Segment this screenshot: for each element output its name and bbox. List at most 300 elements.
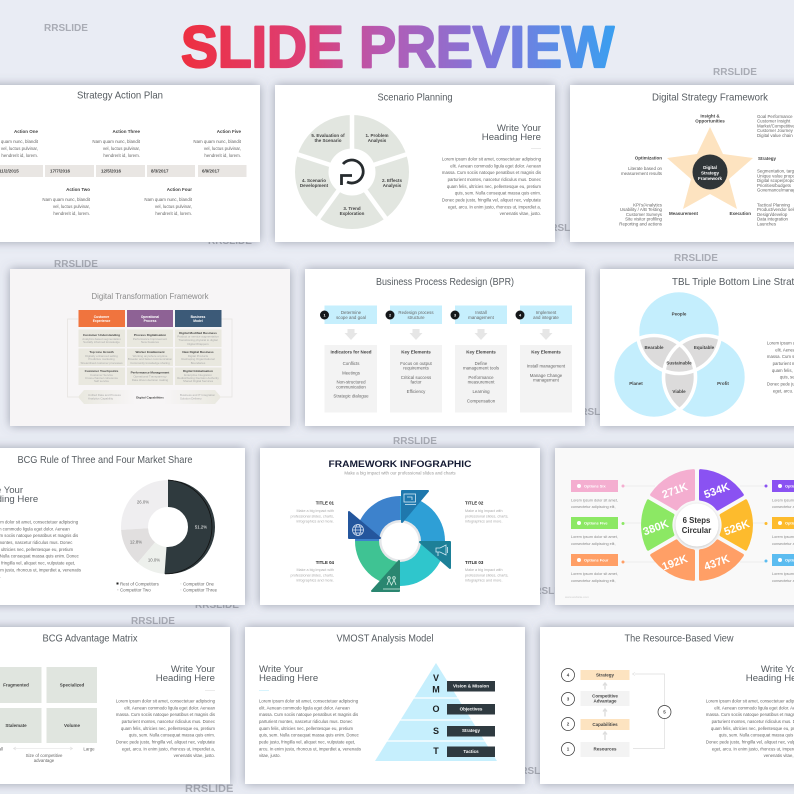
framework table cells: Customer Touchpoints xyxy=(85,369,119,373)
framework table cells xyxy=(78,330,222,385)
star labels: Digital value chain xyxy=(757,133,793,138)
framework table cells: Customer Understanding xyxy=(83,333,120,337)
text block: heading and lorem: Write Your xyxy=(171,664,216,675)
quadrant captions: TITLE 03 xyxy=(465,560,484,565)
quadrant captions: infographics and more. xyxy=(296,578,334,582)
quadrant captions: TITLE 01 xyxy=(316,500,335,506)
indicator and element boxes: Indicators for Need xyxy=(330,350,372,354)
text block: heading and lorem: elit. Aenean commodo ligula eget dolor. Aenean xyxy=(450,163,542,168)
numbered circles: 3 xyxy=(567,696,570,702)
numbered circles: 2 xyxy=(567,722,570,726)
quadrant captions: professional slides, charts, xyxy=(291,514,334,518)
wheel center: 6 Steps xyxy=(683,516,711,525)
heading: digital strategy framework: Digital Strategy Framework xyxy=(652,92,769,104)
heading: bpr: Business Process Redesign (BPR) xyxy=(376,276,514,288)
text block: heading and lorem xyxy=(0,485,81,579)
step headers xyxy=(320,306,572,324)
framework table cells: Redistributing Decision Authority xyxy=(177,376,219,380)
ladder boxes: Resources xyxy=(593,746,617,752)
star labels: Execution xyxy=(729,211,751,216)
action labels: hendrerit id, lorem. xyxy=(204,153,241,158)
step headers: 4 xyxy=(519,314,522,318)
pie: five scenario wedges: 3. Trend xyxy=(343,206,361,211)
donut chart: 12.8% xyxy=(130,540,142,544)
icon: team xyxy=(383,577,400,589)
left option tags: Lorem ipsum dolor sit amet, xyxy=(571,498,618,502)
indicator and element boxes: Meetings xyxy=(342,370,361,376)
axis: size of competitive advantage: Size of competitive xyxy=(26,753,63,758)
action labels: Action Five xyxy=(217,129,241,134)
ladder boxes xyxy=(580,670,630,757)
text block: heading and lorem: venenatis vitae, justo. xyxy=(500,211,541,216)
feedback connector: 5 xyxy=(663,710,666,714)
text block: heading and lorem: Donec pede justo, fringilla vel, aliquet nec, vulputate xyxy=(442,198,542,202)
pie: five scenario wedges: the Scenario xyxy=(314,138,342,143)
star labels xyxy=(619,114,794,226)
venn diagram xyxy=(612,290,746,418)
framework table cells: Customer Service xyxy=(90,373,113,377)
watermarks: RRSLIDE xyxy=(393,436,437,447)
panel: vmost analysis model xyxy=(245,627,525,784)
action labels: Action One xyxy=(14,129,38,134)
left option tags: consectetur adipiscing elit, xyxy=(571,579,616,583)
text block: heading and lorem xyxy=(442,123,542,216)
icon: circular arrow xyxy=(342,160,363,185)
step headers: Determine xyxy=(341,310,362,315)
star labels: Reporting and actions xyxy=(619,222,663,226)
star diagram: Strategy xyxy=(701,170,719,176)
action labels: hendrerit id, lorem. xyxy=(1,153,38,158)
venn diagram: Planet xyxy=(629,381,643,386)
panel: bcg rule of three and four xyxy=(0,448,245,605)
step headers: Redesign process xyxy=(398,310,434,315)
column headers: Process xyxy=(144,319,157,323)
star labels: Customer Insight xyxy=(757,118,791,124)
panel: digital transformation framework xyxy=(10,269,290,426)
text block: heading and lorem xyxy=(116,664,216,758)
watermarks: RRSLIDE xyxy=(131,616,175,627)
framework table cells: Performance Improvement xyxy=(133,337,167,341)
panel: digital strategy framework xyxy=(570,85,794,242)
quadrant captions: TITLE 04 xyxy=(316,560,335,565)
pie: five scenario wedges: 1. Problem xyxy=(365,133,389,138)
star labels: Strategy xyxy=(758,156,777,161)
indicator and element boxes: requirements xyxy=(403,366,430,370)
star diagram: Framework xyxy=(698,176,722,181)
icon: presentation xyxy=(404,494,416,504)
footer url: www.website.com xyxy=(565,595,589,599)
outer connector lines xyxy=(68,319,232,397)
pie: five scenario wedges: 2. Effects xyxy=(382,178,402,183)
heading: vmost: VMOST Analysis Model xyxy=(336,632,434,644)
framework table cells: Digital Globalisation xyxy=(183,369,213,373)
panel: bcg advantage matrix xyxy=(0,627,230,784)
text block: heading and lorem: arcu. In enim justo, rhoncus ut, imperdiet a, venenatis xyxy=(259,746,361,751)
text block: heading and lorem: Lorem ipsum dolor sit amet, consectetuer adipiscing xyxy=(442,156,542,162)
icon: megaphone xyxy=(436,545,448,556)
indicator and element boxes: factor xyxy=(411,380,422,384)
quadrant captions: infographics and more. xyxy=(296,520,334,524)
axis: size of competitive advantage xyxy=(0,746,95,763)
step headers: management xyxy=(468,315,495,320)
indicator and element boxes: communication xyxy=(336,384,366,390)
watermarks: RRSLIDE xyxy=(54,259,98,270)
star labels: Launches xyxy=(757,222,777,226)
heading: bcg advantage matrix: BCG Advantage Matrix xyxy=(42,632,138,644)
quadrant captions: infographics and more. xyxy=(465,520,503,524)
digital capabilities banner: Digital Capabilities xyxy=(136,396,164,400)
action labels: vel, luctus pulvinar, xyxy=(103,146,140,151)
text block: heading and lorem: Heading Here xyxy=(482,132,541,143)
pie: five scenario wedges: Exploration xyxy=(340,211,365,216)
left option tags: Options Six xyxy=(584,484,606,488)
star labels: Customer Journey xyxy=(757,128,794,133)
text block: heading and lorem: Write Your xyxy=(259,664,304,675)
wheel values xyxy=(642,481,751,573)
text block: heading and lorem: Heading Here xyxy=(259,673,318,684)
text block: heading and lorem: massa. Cum sociis natoque penatibus et magnis dis xyxy=(442,170,541,175)
heading: digital transformation framework: Digital Transformation Framework xyxy=(92,292,209,301)
action labels: Nam quam nunc, blandit xyxy=(144,197,193,202)
timeline date bars: 12/5/2016 xyxy=(101,168,122,174)
action labels: vel, luctus pulvinar, xyxy=(1,146,38,151)
matrix quadrants: Volume xyxy=(64,723,80,728)
quadrant captions: Make a big impact with xyxy=(296,568,334,572)
wheel wedges xyxy=(627,459,767,591)
framework table cells: Boundaries xyxy=(191,361,206,365)
text block: heading and lorem: elit. Aenean commodo ligula eget dolor. Aenean xyxy=(124,705,216,710)
left option tags: Lorem ipsum dolor sit amet, xyxy=(571,535,618,539)
indicator and element boxes: Define xyxy=(475,361,488,366)
wheel center: Circular xyxy=(682,526,711,535)
step headers: 3 xyxy=(454,314,456,318)
chart legend: Competitor Two xyxy=(120,588,151,592)
step headers: Install xyxy=(475,310,487,315)
watermarks: RRSLIDE xyxy=(543,223,587,234)
star labels: Usability / A/B Testing xyxy=(620,207,663,212)
framework table cells: Worker Enablement xyxy=(136,350,164,354)
action labels: Action Three xyxy=(112,129,140,134)
matrix quadrants: Specialized xyxy=(60,682,85,688)
heading: scenario planning: Scenario Planning xyxy=(378,92,453,104)
text block: heading and lorem: elit. Aenean commodo ligula eget dolor. Aenean xyxy=(259,705,350,710)
text block: heading and lorem: quis, sem. Nulla consequat massa quis enim. xyxy=(455,191,541,196)
watermarks: RRSLIDE xyxy=(513,766,557,777)
star labels: Data integration xyxy=(757,216,789,222)
pyramid: O xyxy=(432,704,440,714)
numbered circles: 1 xyxy=(567,746,570,752)
matrix quadrants xyxy=(0,667,97,743)
star labels: Opportunities xyxy=(695,118,725,124)
panel: scenario planning xyxy=(275,85,555,242)
framework table cells: Digitally enhanced selling xyxy=(85,354,118,358)
indicator and element boxes: Focus on output xyxy=(400,361,433,366)
ladder boxes: Capabilities xyxy=(592,722,618,727)
timeline date bars: 8/3/2017 xyxy=(151,168,169,174)
digital capabilities banner: Unified Data and Process xyxy=(88,393,121,397)
text block: heading and lorem: quis, sem. Nulla consequat massa quis enim. Donec xyxy=(259,733,360,738)
numbered circles xyxy=(562,668,574,756)
star labels: Priorities/budgets xyxy=(757,183,792,188)
star labels: Market/Competitive xyxy=(757,124,794,128)
indicator and element boxes: Strategic dialogue xyxy=(333,394,369,398)
panel: tbl triple bottom line xyxy=(600,269,794,426)
indicator and element boxes: Compensation xyxy=(467,398,496,404)
text block: heading and lorem xyxy=(706,664,794,758)
framework table cells: New Digital Business xyxy=(182,350,214,354)
indicator and element boxes xyxy=(324,345,572,412)
timeline date bars xyxy=(0,165,246,177)
framework table cells: Digital Wrappers xyxy=(187,342,209,346)
indicator and element boxes: Efficiency xyxy=(407,389,426,394)
action labels: vel, luctus pulvinar, xyxy=(53,204,90,209)
framework table cells: Reshaping Organizational xyxy=(181,357,215,361)
ladder boxes: Strategy xyxy=(596,672,614,678)
action labels xyxy=(0,129,242,216)
right option tags xyxy=(764,480,794,583)
watermarks: RRSLIDE xyxy=(208,236,252,247)
donut chart: 26.0% xyxy=(137,500,149,504)
watermarks: RRSLIDE xyxy=(713,67,757,78)
framework table cells: Top Line Growth xyxy=(89,350,114,354)
chart legend: Competitor Three xyxy=(183,588,218,592)
pyramid: V xyxy=(433,673,439,683)
star labels: Tactical Planning xyxy=(757,202,791,208)
digital capabilities banner: Analytics Capability xyxy=(88,396,114,400)
axis: size of competitive advantage: advantage xyxy=(34,758,55,763)
framework table cells: Transitioning physical to digital xyxy=(178,338,218,342)
pyramid: S xyxy=(433,726,439,736)
pyramid level labels: Tactics xyxy=(463,749,479,754)
connector lines xyxy=(623,486,766,562)
framework table cells: Broader and faster communication xyxy=(128,357,172,361)
text block: heading and lorem: Donec pede justo, fringilla vel, aliquet nec, vulputate xyxy=(116,740,216,744)
text block: heading and lorem: parturient montes, nascetur ridiculus mus. Donec xyxy=(448,177,542,182)
feedback connector xyxy=(632,672,671,748)
indicator and element boxes: Manage Change xyxy=(530,373,563,378)
pie: five scenario wedges xyxy=(295,112,409,229)
quadrant captions: Make a big impact with xyxy=(465,568,503,572)
indicator and element boxes: Learning xyxy=(472,389,490,394)
left option tags xyxy=(571,480,624,583)
framework table cells: Predictive marketing xyxy=(88,357,115,361)
venn diagram: People xyxy=(672,312,687,316)
star labels: Design/develop xyxy=(757,212,788,217)
star labels: Measurement xyxy=(669,211,699,216)
indicator and element boxes: Conflicts xyxy=(343,361,360,366)
indicator and element boxes: Critical success xyxy=(401,375,432,380)
left option tags: consectetur adipiscing elit, xyxy=(571,505,616,509)
indicator and element boxes: management tools xyxy=(463,366,500,370)
quadrant captions: infographics and more. xyxy=(465,578,503,582)
wheel values: 437K xyxy=(703,553,731,573)
numbered circles: 4 xyxy=(567,672,570,678)
text block: heading and lorem: parturient montes, nascetur ridiculus mus. Donec xyxy=(122,719,216,724)
pie: five scenario wedges: 4. Scenario xyxy=(302,178,326,183)
left option tags: Options Four xyxy=(584,558,609,562)
venn diagram: Profit xyxy=(717,381,729,386)
panel: framework infographic xyxy=(260,448,540,605)
down arrows xyxy=(344,329,552,340)
timeline date bars: 17/7/2016 xyxy=(50,168,71,174)
action labels: Nam quam nunc, blandit xyxy=(193,139,242,144)
action labels: Nam quam nunc, blandit xyxy=(42,197,91,202)
text block: heading and lorem: quis, sem. Nulla consequat massa quis enim. xyxy=(129,733,215,738)
step headers: Implement xyxy=(536,310,557,315)
chart legend: Rest of Competitors xyxy=(120,582,160,586)
watermarks: RRSLIDE xyxy=(674,253,718,264)
heading: resource-based view: The Resource-Based View xyxy=(624,632,734,644)
column headers: Experience xyxy=(93,319,110,323)
ladder boxes: Advantage xyxy=(593,698,617,704)
indicator and element boxes: measurement xyxy=(468,380,495,384)
subheading: Make a big impact with our professional slides and charts xyxy=(344,470,456,476)
quadrant captions: TITLE 02 xyxy=(465,500,484,506)
pyramid level labels xyxy=(447,681,495,757)
star diagram xyxy=(667,127,753,209)
quadrant captions: professional slides, charts, xyxy=(465,514,508,518)
text block: heading and lorem: venenatis vitae, justo. xyxy=(174,753,215,758)
left option tags: Lorem ipsum dolor sit amet, xyxy=(571,572,618,576)
pyramid xyxy=(370,663,500,761)
indicator and element boxes: Key Elements xyxy=(466,350,496,354)
star labels: measurement results xyxy=(621,171,663,176)
text block: heading and lorem: massa. Cum sociis natoque penatibus et magnis dis xyxy=(259,712,358,717)
pyramid level labels: Objectives xyxy=(460,706,483,712)
ladder boxes: Competitive xyxy=(592,694,618,698)
pyramid level labels: Strategy xyxy=(462,728,480,733)
panel: strategy action plan xyxy=(0,85,260,242)
pie: five scenario wedges: Analysis xyxy=(383,183,402,188)
indicator and element boxes: management xyxy=(533,378,560,382)
framework table cells: Community knowledge sharing xyxy=(130,361,170,365)
watermarks: RRSLIDE xyxy=(527,586,571,597)
quadrant captions xyxy=(291,500,508,582)
action labels: vel, luctus pulvinar, xyxy=(155,204,192,209)
framework table cells: Socially informed knowledge xyxy=(83,340,120,344)
text block: heading and lorem: quam felis, ultricies nec, pellentesque eu, pretium xyxy=(447,184,541,189)
text block: heading and lorem: parturient montes, nascetur ridiculus mus. Donec xyxy=(259,719,353,724)
wheel values: 380K xyxy=(642,518,670,538)
star labels: Optimization xyxy=(635,156,662,160)
star labels: KPI's/Analytics xyxy=(633,202,663,208)
wheel values: 192K xyxy=(661,553,689,573)
framework table cells: Self service xyxy=(94,379,109,383)
text block: heading and lorem: Write Your xyxy=(497,123,542,134)
pie: five scenario wedges: Development xyxy=(300,183,329,188)
star labels: Site visitor profiling xyxy=(625,216,663,222)
framework table cells: Performance Management xyxy=(131,370,169,374)
panel: business process redesign xyxy=(305,269,585,426)
star labels: Goal Performance xyxy=(757,114,793,119)
step headers: and integrate xyxy=(533,315,559,320)
text block: heading and lorem xyxy=(259,664,361,758)
action labels: hendrerit id, lorem. xyxy=(103,153,140,158)
framework table cells: Digital Products xyxy=(188,354,209,358)
wheel values: 271K xyxy=(661,481,689,501)
axis: size of competitive advantage: Large xyxy=(83,746,95,752)
circular quadrant diagram xyxy=(349,491,450,591)
star labels: Literate based on xyxy=(628,166,663,171)
framework table cells: New Features xyxy=(141,340,160,344)
left option tags: consectetur adipiscing elit, xyxy=(571,542,616,546)
text block: heading and lorem: Lorem ipsum dolor sit amet, consectetuer adipiscing xyxy=(116,698,216,704)
action labels: vel, luctus pulvinar, xyxy=(204,146,241,151)
pyramid: T xyxy=(433,746,439,756)
text block: heading and lorem: Lorem ipsum dolor sit amet, consectetuer adipiscing xyxy=(259,698,359,704)
column headers: Model xyxy=(193,319,203,323)
indicator and element boxes: Non-structured xyxy=(336,380,366,384)
pyramid level labels: Vision & Mission xyxy=(453,684,489,688)
venn diagram: Sustainable xyxy=(666,360,692,366)
text block: heading and lorem: eget, arcu. In enim justo, rhoncus ut, imperdiet a, xyxy=(448,204,541,209)
indicator and element boxes: Key Elements xyxy=(401,350,431,354)
watermarks: RRSLIDE xyxy=(44,23,88,34)
digital capabilities banner: Solution Delivery xyxy=(180,396,202,400)
venn diagram: Equitable xyxy=(694,345,715,350)
matrix quadrants: Fragmented xyxy=(3,682,29,688)
column headers: Customer xyxy=(94,315,110,319)
panel: resource-based view xyxy=(540,627,794,784)
quadrant captions: Make a big impact with xyxy=(296,509,334,513)
title: SLIDE PREVIEW xyxy=(181,15,614,80)
action labels: Action Four xyxy=(167,187,192,192)
framework table cells: Analytics-based segmentation xyxy=(82,337,121,341)
quadrant captions: Make a big impact with xyxy=(465,509,503,513)
watermarks: RRSLIDE xyxy=(195,600,239,611)
left option tags: Options Five xyxy=(584,520,608,526)
digital capabilities banner: Business and IT Integration xyxy=(180,393,216,397)
icon: globe xyxy=(352,524,364,536)
star diagram: Digital xyxy=(703,165,717,170)
panel: 6 steps circular xyxy=(555,448,794,605)
quadrant captions: professional slides, charts, xyxy=(465,574,508,578)
step headers: scope and goal xyxy=(336,315,366,320)
text block: heading and lorem: pede justo, fringilla vel, aliquet nec, vulputate eget, xyxy=(259,740,355,744)
up arrows xyxy=(603,683,607,740)
text block: heading and lorem: vitae, justo. xyxy=(259,753,281,758)
chart legend xyxy=(116,582,218,592)
framework table cells: Process Digitalisation xyxy=(134,333,166,337)
chart legend: Competitor One xyxy=(183,582,215,586)
indicator and element boxes: Performance xyxy=(468,375,494,380)
column headers: Business xyxy=(191,315,205,319)
star labels: Customer Surveys xyxy=(626,212,663,217)
digital capabilities banner xyxy=(78,390,221,404)
wheel values: 534K xyxy=(703,481,731,501)
donut chart: 10.0% xyxy=(148,558,160,562)
column headers xyxy=(78,310,222,327)
venn diagram: Viable xyxy=(672,389,686,394)
timeline date bars: 6/9/2017 xyxy=(202,168,220,174)
donut chart: 51.2% xyxy=(195,524,207,530)
venn diagram: Bearable xyxy=(644,345,664,350)
step headers: 1 xyxy=(323,314,326,318)
heading: strategy action plan: Strategy Action Plan xyxy=(77,90,163,102)
quadrant captions: professional slides, charts, xyxy=(291,574,334,578)
framework table cells: Data driven decision making xyxy=(132,378,169,382)
text block: heading and lorem: massa. Cum sociis natoque penatibus et magnis dis xyxy=(116,712,215,717)
framework table cells: Product or service augmentation xyxy=(177,334,219,338)
text block: heading and lorem: quam felis, ultricies nec, pellentesque eu, pretium xyxy=(259,726,354,731)
action labels: hendrerit id, lorem. xyxy=(53,211,90,216)
step headers: structure xyxy=(407,315,425,320)
indicator and element boxes: Install management xyxy=(527,364,566,368)
heading: framework infographic: FRAMEWORK INFOGRAPHIC xyxy=(328,459,472,470)
step headers: 2 xyxy=(389,314,391,318)
framework table cells: Digital Modified Business xyxy=(179,331,217,335)
donut chart xyxy=(130,480,212,574)
